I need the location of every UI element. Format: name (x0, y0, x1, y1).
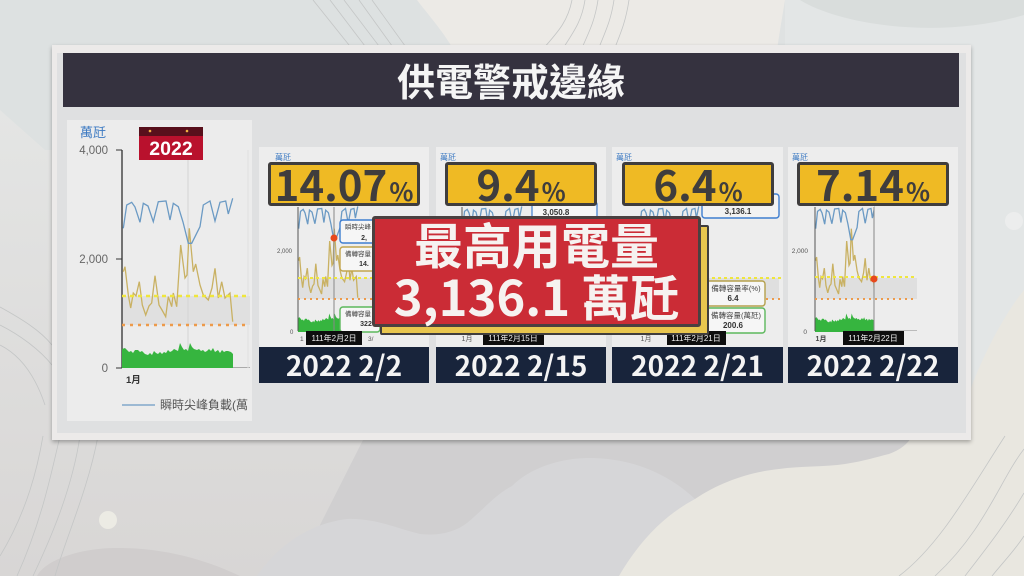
chart: 2/21 mini chart: 1月 (641, 335, 651, 343)
chart: full-period load and reserve: 1月 (126, 375, 141, 386)
chart: 2/21 mini chart: 3,136.1 (725, 207, 752, 216)
callout heading: 最高用電量 (414, 208, 659, 279)
title bar: 供電警戒邊緣 (397, 52, 625, 107)
icon: 2022 calendar (139, 127, 203, 160)
chart: 2/2 mini chart: 322 (360, 321, 372, 328)
chart: 2/22 mini chart: 0 (803, 329, 807, 336)
chart: 2/21 mini chart: 200.6 (723, 321, 744, 330)
chart: 2/22 mini chart: 1月 (816, 335, 826, 343)
reserve margin: 6.4% (622, 162, 774, 206)
chart: 2/2 mini chart: 111年2月2日 (311, 333, 357, 343)
date label: 2022 2/21: 2022 2/21 (631, 345, 764, 385)
date label: 2022 2/22: 2022 2/22 (807, 345, 939, 385)
panel: date card 2/22 (788, 147, 958, 383)
reserve margin: 14.07%: 14.07% (275, 153, 413, 214)
panel: date card 2/21 (612, 147, 783, 383)
chart: 2/2 mini chart: 1 (300, 336, 304, 343)
chart: full-period load and reserve: 瞬時尖峰負載(萬 (160, 398, 248, 412)
chart: 2/21 mini chart: 備轉容量率(%) (711, 283, 761, 293)
chart: 2/22 mini chart: 111年2月22日 (848, 333, 898, 343)
chart: 2/2 mini chart: 0 (290, 330, 294, 336)
chart: 2/22 mini chart (792, 152, 917, 345)
yellow backing box (380, 225, 709, 335)
callout value: 3,136.1 萬瓩 (394, 260, 679, 331)
chart: full-period load and reserve: 2,000 (79, 254, 108, 266)
callout: peak demand (372, 216, 701, 327)
reserve margin: 6.4%: 6.4% (653, 153, 743, 214)
chart: 2/21 mini chart: 6.4 (727, 294, 739, 303)
chart: 2/2 mini chart: 3/ (368, 336, 374, 343)
chart: full-period load and reserve: 萬瓩 (80, 125, 106, 140)
reserve margin: 7.14%: 7.14% (816, 153, 930, 214)
date label: 2022 2/15: 2022 2/15 (455, 345, 587, 385)
chart: 2/2 mini chart: 2,000 (277, 249, 293, 255)
chart: 2/2 mini chart: 備轉容量 (345, 249, 372, 258)
chart: full-period load and reserve: 0 (102, 363, 108, 375)
reserve margin: 9.4% (445, 162, 597, 206)
chart: full-period load and reserve: 4,000 (79, 145, 108, 157)
panel: date card 2/2 (259, 147, 429, 383)
chart: 2/2 mini chart: 備轉容量 (345, 309, 372, 318)
chart: 2/15 mini chart: 1月 (462, 335, 472, 343)
icon: 2022 calendar: 2022 (149, 138, 193, 160)
chart: 2/21 mini chart: 備轉容量(萬瓩) (711, 310, 761, 320)
chart: 2/21 mini chart: 萬瓩 (616, 152, 632, 162)
chart: 2/15 mini chart: 3,050.8 (543, 208, 570, 217)
reserve margin: 9.4%: 9.4% (476, 153, 566, 214)
title bar (63, 53, 959, 107)
chart: 2/2 mini chart: 瞬時尖峰 (345, 222, 372, 231)
main panel (52, 45, 971, 440)
reserve margin: 7.14% (797, 162, 949, 206)
chart: full-period load and reserve (79, 125, 250, 412)
panel: full-period chart (67, 120, 252, 421)
date label: 2022 2/2: 2022 2/2 (286, 345, 402, 385)
chart: 2/22 mini chart: 2,000 (792, 248, 808, 255)
chart: 2/2 mini chart (275, 152, 380, 345)
chart: 2/2 mini chart: 2, (361, 235, 367, 242)
chart: 2/22 mini chart: 萬瓩 (792, 152, 808, 162)
reserve margin: 14.07% (268, 162, 420, 206)
chart: 2/15 mini chart (440, 152, 597, 345)
chart: 2/21 mini chart: 111年2月21日 (671, 333, 721, 343)
panel: date card 2/15 (436, 147, 606, 383)
date label: 2022 2/2 (259, 347, 429, 383)
chart: 2/15 mini chart: 111年2月15日 (488, 333, 538, 343)
chart: 2/2 mini chart: 萬瓩 (275, 152, 291, 162)
chart: 2/21 mini chart (616, 152, 782, 345)
chart: 2/2 mini chart: 14. (359, 261, 369, 268)
chart: 2/15 mini chart: 萬瓩 (440, 152, 456, 162)
